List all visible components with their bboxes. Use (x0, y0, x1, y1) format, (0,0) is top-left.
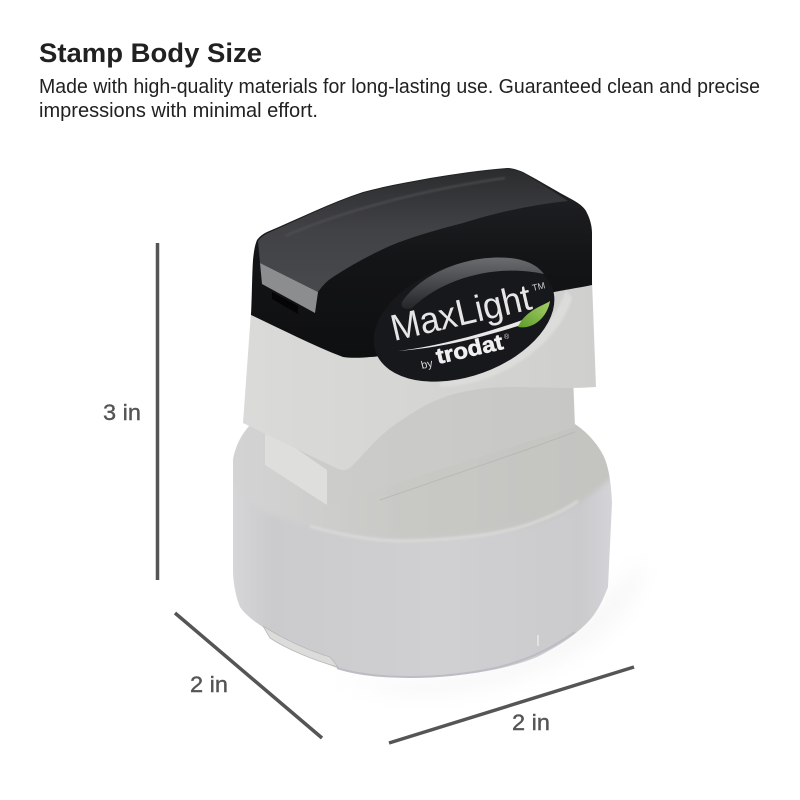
height label: 3 in (103, 400, 141, 425)
base top rim highlight (310, 501, 578, 541)
base notch (537, 635, 539, 646)
base bottom edge (337, 632, 575, 677)
stamp neck (265, 375, 575, 505)
stamp base cylinder (225, 410, 625, 677)
description text: impressions with minimal effort. (39, 100, 318, 122)
width label: 2 in (512, 710, 550, 735)
cap grey window (260, 263, 318, 313)
depth dimension line (175, 613, 322, 738)
swoosh (398, 318, 528, 351)
cap top inner highlight (285, 178, 505, 236)
base top ridge line (380, 432, 575, 500)
title: Stamp Body Size (39, 38, 262, 68)
logo oval: trodat (434, 329, 506, 369)
stamp black cap (251, 168, 592, 358)
registered mark: ® (504, 333, 510, 341)
oval halo (440, 290, 572, 387)
logo oval (357, 235, 572, 405)
base clip tab (263, 626, 338, 667)
trademark: TM (531, 280, 546, 293)
cap top face (258, 169, 568, 292)
leaf (518, 301, 550, 327)
stamp illustration (233, 168, 612, 678)
depth label: 2 in (190, 672, 228, 697)
description text: Made with high-quality materials for long-lasting use. Guaranteed clean and precise (39, 76, 760, 98)
width dimension line (389, 667, 634, 743)
description text (39, 76, 760, 122)
base top face (233, 424, 610, 538)
oval gloss (402, 257, 544, 309)
by trodat wordmark: by (420, 358, 434, 372)
stamp grey body (243, 280, 596, 470)
MaxLight wordmark: MaxLight (387, 277, 536, 349)
cap slot (272, 292, 298, 314)
height dimension line (156, 243, 159, 580)
ground shadow (300, 560, 645, 695)
